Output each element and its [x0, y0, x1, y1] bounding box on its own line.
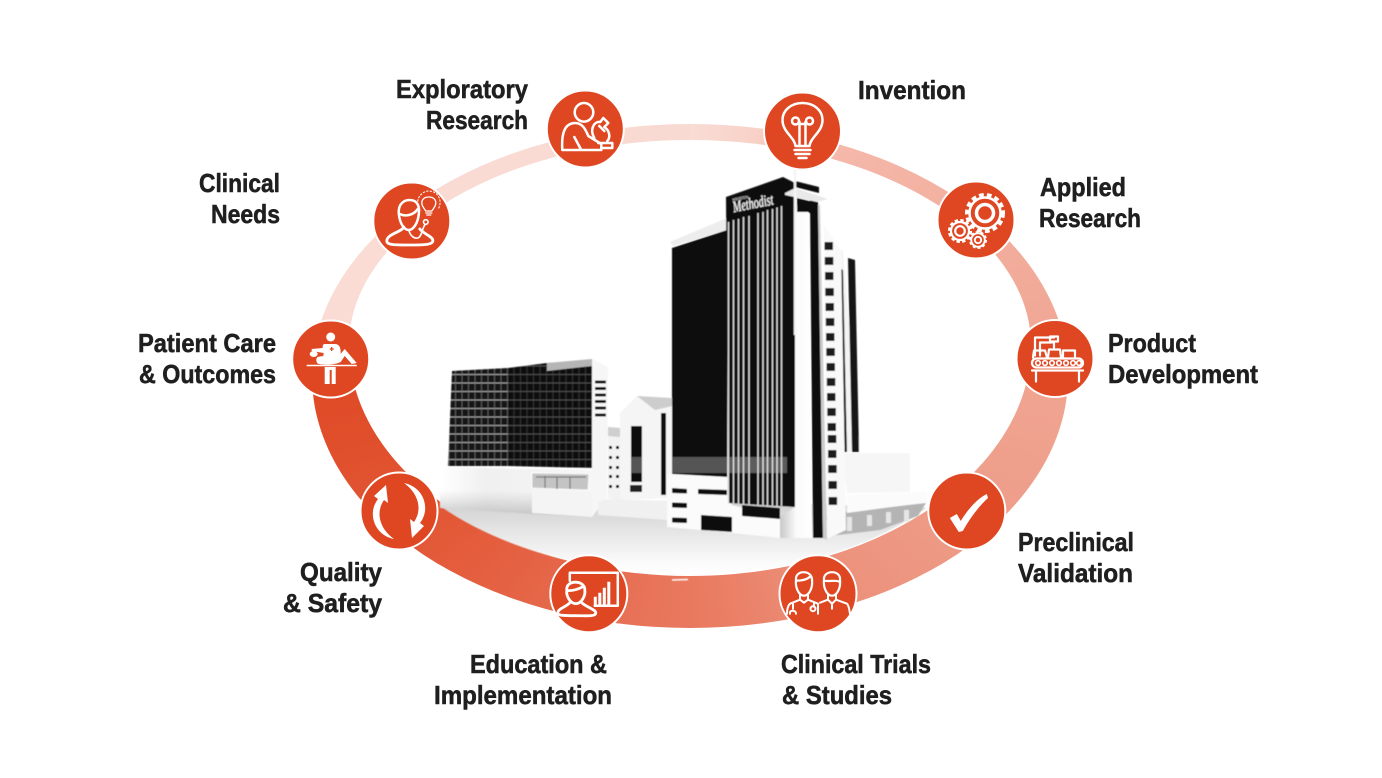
tower roof cap and antenna: [785, 170, 828, 335]
label: [283, 557, 383, 618]
label: Implementation: [434, 680, 612, 710]
logo: HOUSTON: [732, 194, 749, 202]
node: Product Development: [1016, 320, 1258, 397]
label: Exploratory: [396, 74, 528, 104]
node: Preclinical Validation: [928, 472, 1134, 588]
label: [1108, 328, 1258, 389]
label: & Outcomes: [139, 359, 276, 389]
cycle ring with gradient: [313, 124, 1067, 628]
label: [1039, 172, 1141, 233]
middle buildings: [598, 396, 672, 520]
label: Preclinical: [1018, 527, 1134, 557]
node: Clinical Needs: [199, 168, 450, 260]
node: Applied Research: [938, 172, 1141, 258]
label: [781, 649, 931, 710]
label: [434, 649, 612, 710]
label: Validation: [1018, 558, 1133, 588]
label: [1018, 527, 1134, 588]
node: Patient Care & Outcomes: [138, 320, 369, 398]
icon: circular arrows: [373, 483, 425, 539]
icon: two clinicians: [787, 572, 850, 614]
logo: Methodist: [731, 192, 775, 216]
tower glass side: [670, 218, 727, 477]
node: Education & Implementation: [434, 555, 627, 710]
label: Development: [1108, 359, 1258, 389]
right low wing: [826, 453, 928, 536]
label: Quality: [300, 557, 382, 587]
label: Patient Care: [138, 328, 276, 358]
label: [396, 74, 528, 135]
icon: presenter with chart: [558, 573, 618, 616]
label: & Studies: [782, 680, 892, 710]
tower front face: [726, 177, 795, 507]
label: Needs: [211, 199, 280, 229]
label: Research: [1039, 203, 1141, 233]
icon: doctor with idea bulb: [387, 191, 440, 245]
icon: conveyor belt with robot arm: [1032, 336, 1083, 382]
label: Applied: [1040, 172, 1126, 202]
node: Invention: [764, 75, 966, 170]
label: & Safety: [283, 588, 383, 618]
label: Research: [426, 105, 528, 135]
node: Exploratory Research: [396, 74, 624, 168]
label: Product: [1108, 328, 1196, 358]
icon: caregiver and patient: [307, 332, 357, 384]
label: Education &: [470, 649, 607, 679]
icon: three gears: [949, 195, 1003, 248]
icon: light bulb: [782, 103, 822, 158]
tower podium: [667, 474, 780, 538]
hospital buildings illustration: [440, 170, 928, 580]
icon: check mark: [950, 494, 988, 532]
ring speck: [672, 578, 688, 581]
label: Invention: [858, 75, 966, 105]
icon: researcher with microscope: [562, 103, 612, 150]
ground plane: [440, 500, 926, 574]
label: Clinical: [199, 168, 280, 198]
node: Clinical Trials & Studies: [780, 555, 931, 710]
left glass building: [440, 359, 608, 517]
tower right columns: [780, 200, 860, 540]
label: [138, 328, 276, 389]
label: Clinical Trials: [781, 649, 931, 679]
node: Quality & Safety: [283, 472, 438, 618]
label: [199, 168, 280, 229]
logo: [730, 190, 775, 216]
